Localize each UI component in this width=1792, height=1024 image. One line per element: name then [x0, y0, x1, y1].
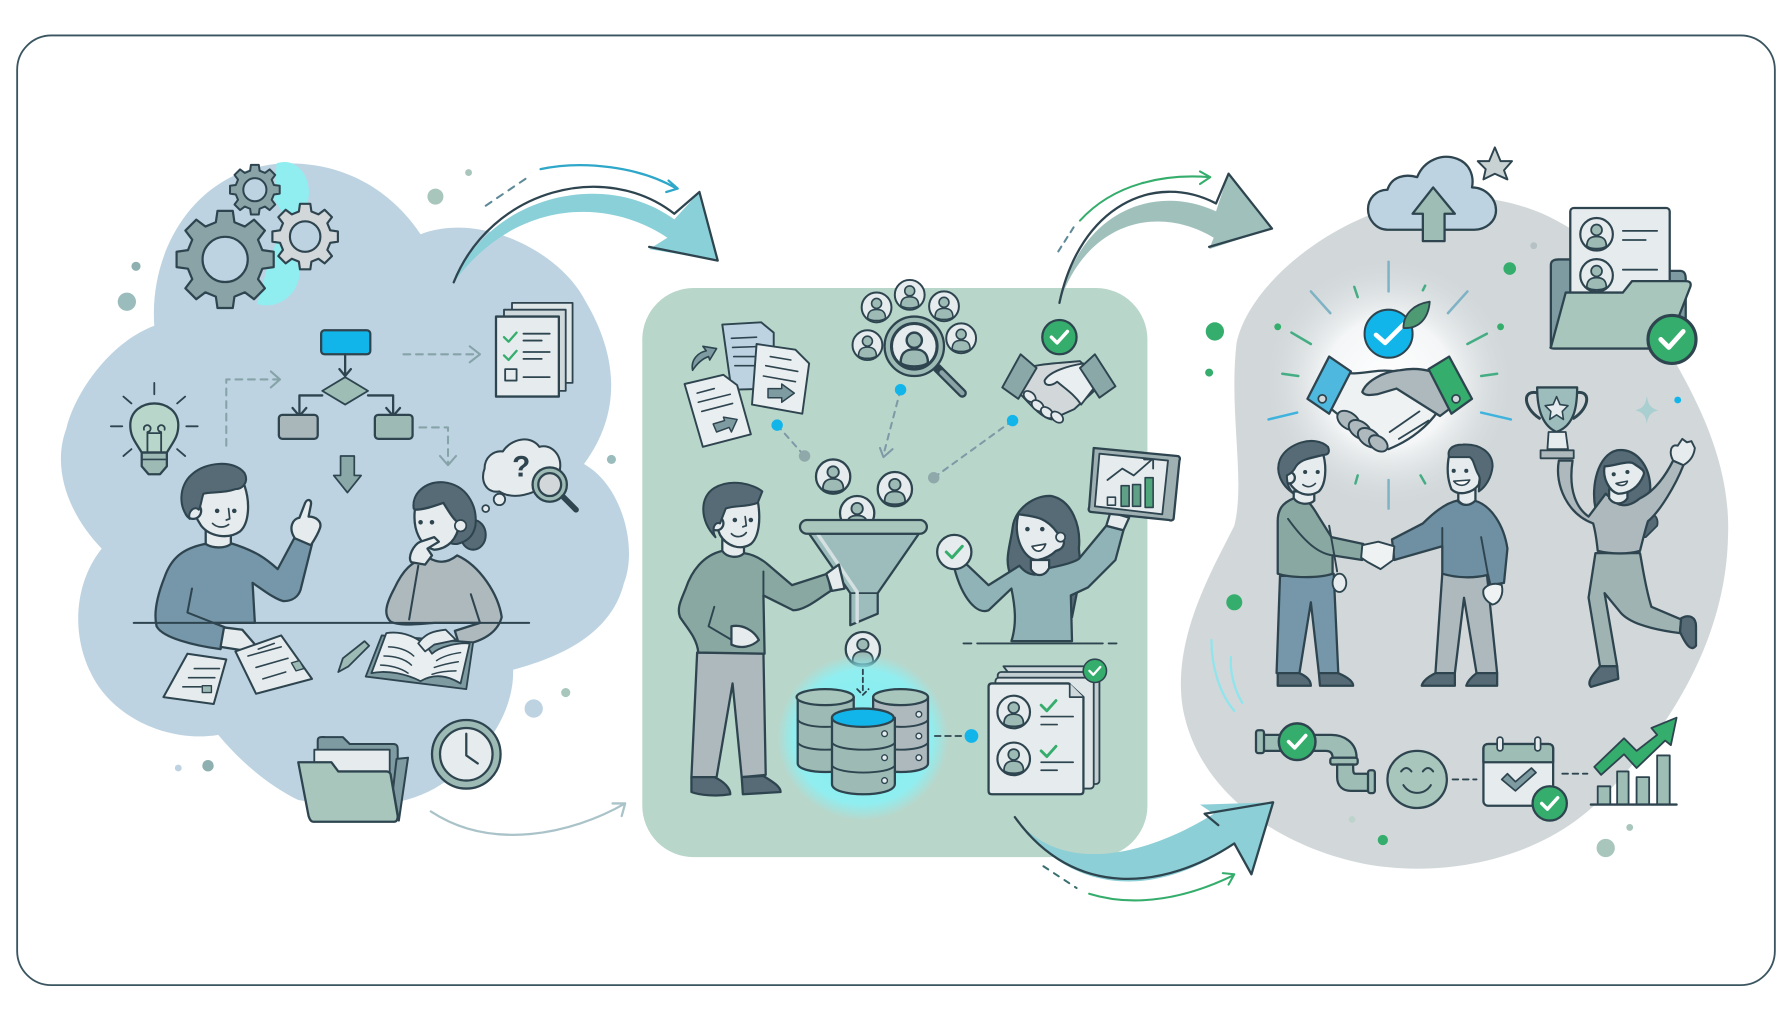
avatar above database — [846, 632, 880, 666]
person: woman with trophy — [1526, 387, 1696, 687]
green cuff — [1429, 357, 1472, 414]
face — [194, 486, 248, 536]
icon: pipe with check — [1256, 723, 1375, 793]
table line — [134, 622, 529, 624]
person: woman thinking — [386, 482, 502, 646]
small dashed arrow — [486, 177, 528, 206]
connector dots — [771, 384, 1018, 483]
sweater — [1278, 498, 1363, 577]
fingers — [1334, 407, 1391, 455]
icon: sparkle — [1635, 395, 1658, 424]
arrow: flowchart down — [334, 456, 361, 493]
dark edge — [1059, 174, 1272, 303]
panel: results blob — [1181, 147, 1728, 869]
arrow: filtering to results bottom — [1015, 802, 1273, 900]
blue blob background — [61, 163, 629, 806]
arrow: planning to filtering — [454, 165, 718, 282]
sweater — [155, 537, 312, 649]
hair back — [413, 482, 476, 544]
decorative dots — [118, 169, 616, 771]
connector to profiles — [935, 735, 961, 737]
person: left man shaking hands — [1277, 441, 1363, 686]
neck and face — [1458, 489, 1475, 505]
hair — [1278, 441, 1329, 494]
icon: documents — [685, 322, 809, 447]
panel: planning blob — [61, 162, 629, 822]
left cylinder — [798, 697, 854, 772]
connector dot — [965, 729, 978, 743]
neck and face — [1609, 489, 1627, 503]
small dashed arrow — [857, 670, 869, 695]
gray blob background — [1181, 197, 1728, 869]
shoes — [1422, 673, 1455, 686]
face — [715, 501, 759, 547]
icon: handshake and check — [1002, 320, 1115, 425]
icon: small handshake — [1361, 542, 1394, 569]
sweater — [386, 555, 502, 646]
hair bun — [461, 520, 486, 550]
green panel background — [642, 288, 1147, 857]
hands — [826, 565, 845, 591]
icon: blue check with leaf — [1365, 302, 1430, 358]
icon: star — [1478, 147, 1512, 179]
gray-teal sweep — [1059, 174, 1272, 303]
sweater — [1558, 461, 1683, 553]
icon: tablet — [1089, 448, 1180, 520]
document left — [163, 654, 226, 704]
shoes — [1589, 666, 1618, 687]
right-side arm and fist — [1333, 574, 1346, 592]
rays — [1269, 262, 1511, 509]
neck — [206, 523, 231, 547]
icon: candidate folder — [1550, 208, 1696, 363]
icon: check circle — [937, 535, 971, 569]
neck — [722, 535, 744, 557]
icon: trophy — [1526, 387, 1587, 458]
waving hand — [1671, 439, 1695, 465]
teal sweep — [1015, 802, 1273, 881]
blue cuff — [1307, 357, 1351, 414]
icon: clock — [432, 720, 501, 789]
icon: thought cloud and magnifier — [482, 439, 576, 512]
hair — [1449, 444, 1493, 491]
hand — [1483, 584, 1502, 605]
trousers — [1435, 574, 1497, 673]
teal sweep — [454, 192, 718, 282]
icon: checklist documents — [496, 303, 573, 397]
hand on paper — [221, 627, 256, 651]
icon: big handshake — [1307, 357, 1472, 455]
small dashed segment — [1043, 866, 1077, 888]
white hand — [1331, 371, 1438, 449]
person: woman with tablet — [937, 448, 1180, 641]
front cylinder — [832, 718, 895, 794]
face details — [217, 509, 234, 513]
person: right man shaking hands — [1392, 444, 1507, 686]
hand at chin — [410, 537, 439, 565]
document right — [235, 635, 312, 694]
small green arrow — [1080, 171, 1210, 221]
icon: open book — [366, 630, 473, 689]
decorative dots — [1205, 242, 1681, 857]
small dashed segment — [1058, 226, 1074, 251]
dash line under woman — [963, 642, 1117, 644]
flowchart — [279, 330, 413, 439]
panel: filtering — [642, 280, 1180, 857]
motion lines — [1211, 640, 1242, 711]
hand — [1106, 511, 1129, 530]
icon: pencil — [338, 641, 369, 672]
person: man with funnel — [679, 483, 845, 795]
shoes — [691, 777, 730, 795]
arrow: filtering to results top — [1058, 171, 1272, 303]
glow behind handshake — [1261, 255, 1517, 511]
icon: database — [797, 689, 928, 794]
dark edge — [454, 187, 718, 282]
person: man pointing — [155, 464, 320, 651]
icon: funnel — [800, 520, 927, 625]
dashes — [1453, 774, 1587, 779]
avatars entering funnel — [816, 459, 912, 530]
icon: people and magnifier — [853, 280, 976, 393]
trousers — [1277, 574, 1338, 673]
neck and face — [1294, 491, 1314, 504]
ray dots — [1274, 323, 1504, 330]
dashed connectors — [777, 390, 1013, 478]
icon: smiley — [1387, 751, 1447, 808]
sweater — [679, 551, 831, 654]
icon: cloud upload — [1368, 157, 1496, 241]
right cylinder — [873, 697, 928, 772]
neck — [1031, 560, 1049, 575]
hair — [1008, 496, 1081, 617]
icon: profile documents — [989, 659, 1107, 794]
icon: calendar — [1483, 737, 1567, 821]
icon: thought cloud and magnifier: ? — [512, 451, 530, 484]
arrow: thin lower curve — [431, 803, 625, 835]
sweater — [1392, 501, 1507, 585]
shoes — [1278, 673, 1311, 686]
icon: light bulb — [111, 383, 198, 474]
icon: folder — [298, 737, 408, 822]
database glow — [777, 654, 949, 821]
small green arrow — [1089, 873, 1234, 900]
cyan highlight behind gears — [257, 162, 309, 305]
raised hand — [291, 500, 320, 545]
face — [1017, 514, 1064, 560]
dark edge — [1015, 802, 1273, 879]
sweater — [954, 526, 1123, 641]
gray hand — [1362, 369, 1449, 416]
icon: growth chart — [1591, 718, 1677, 805]
dashed arrows — [226, 346, 480, 465]
hair — [703, 483, 762, 537]
hair back — [1594, 450, 1650, 509]
trousers — [1589, 553, 1681, 666]
hair — [181, 464, 246, 519]
trousers — [691, 653, 766, 777]
face — [414, 503, 459, 550]
icon: gears — [177, 165, 338, 308]
face details — [735, 518, 751, 522]
